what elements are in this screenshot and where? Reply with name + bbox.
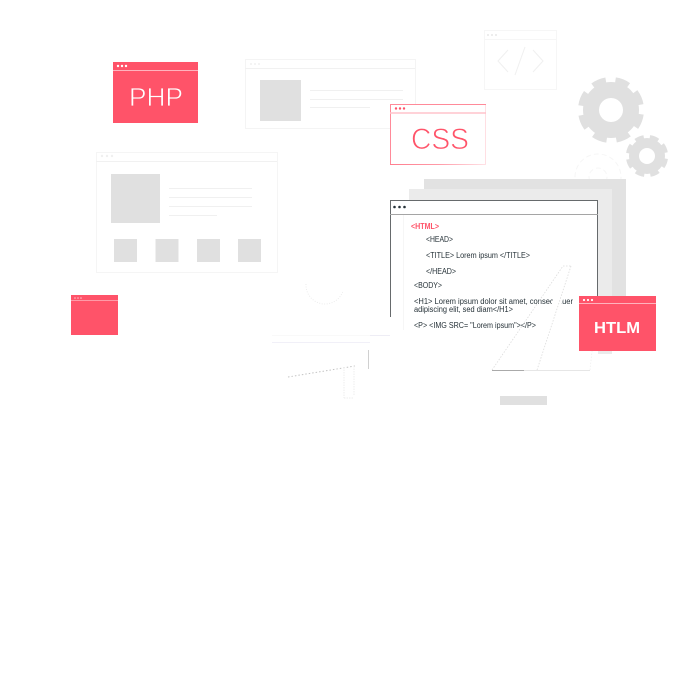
panel: CSS window: CSS <box>411 123 469 156</box>
code text: <HTML> <box>411 222 439 231</box>
panel: HTLM window: HTLM <box>594 320 640 337</box>
code text: </HEAD> <box>426 267 456 276</box>
panel: faint code window <box>484 30 557 90</box>
panel: back grey sheet <box>424 179 626 297</box>
illustration: faint desk and chair outlines <box>272 284 390 398</box>
code text: <BODY> <box>414 281 442 290</box>
panel: image and text window <box>245 60 416 128</box>
panel: small red window <box>71 295 118 335</box>
icon: small gear <box>620 129 674 183</box>
code text: adipiscing elit, sed diam</H1> <box>414 305 513 314</box>
panel: CSS window <box>390 104 486 165</box>
panel: left wireframe window <box>96 152 278 272</box>
panel: HTML code window <box>390 200 598 370</box>
code text: <HEAD> <box>426 235 453 244</box>
monitor stand base <box>500 396 547 405</box>
icon: code brackets <box>498 47 543 75</box>
panel: PHP window: PHP <box>129 82 183 112</box>
code text <box>411 222 573 330</box>
panel: middle grey sheet <box>409 189 612 354</box>
illustration: faint monitor outline <box>492 266 598 370</box>
code text: <P> <IMG SRC= "Lorem ipsum"></P> <box>414 321 536 330</box>
panel: PHP window <box>113 62 198 123</box>
code text: <TITLE> Lorem ipsum </TITLE> <box>426 251 530 260</box>
panel: HTLM window <box>579 296 656 351</box>
code text: <H1> Lorem ipsum dolor sit amet, consectetuer <box>414 297 573 306</box>
icon: faint outline gear <box>575 154 621 200</box>
icon: large gear <box>569 68 653 152</box>
